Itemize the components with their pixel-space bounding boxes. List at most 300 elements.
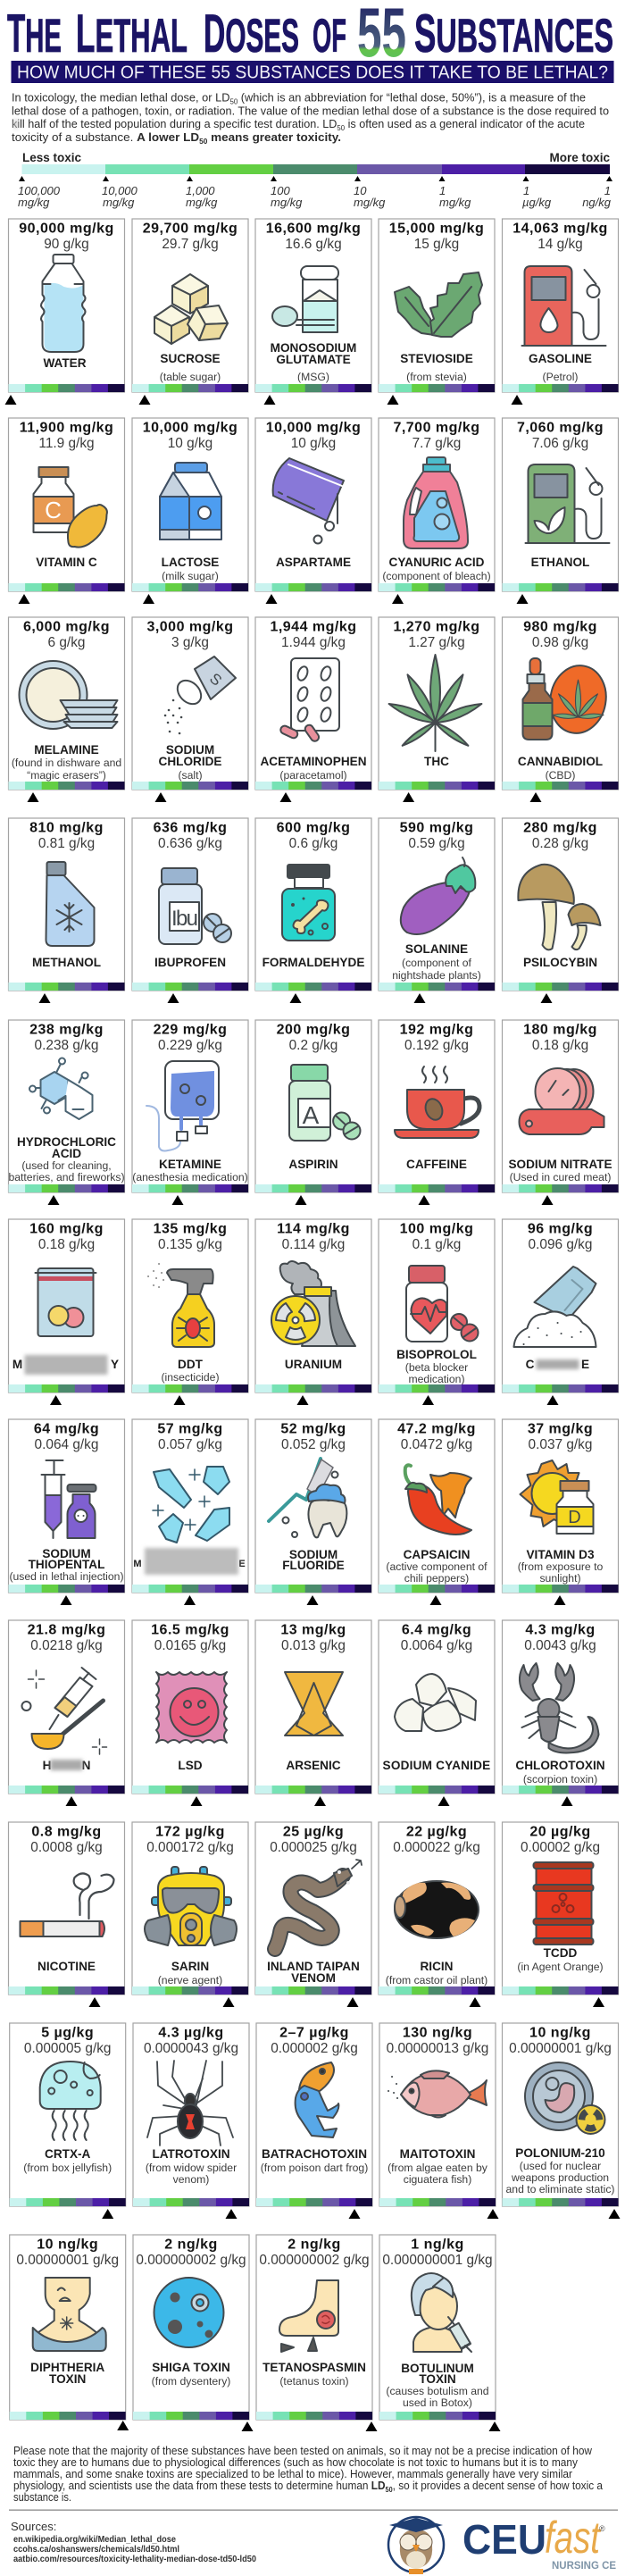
marker (61, 1595, 71, 1605)
dose: 0.18 g/kg (38, 1237, 95, 1252)
marker (241, 2421, 254, 2431)
sources: Sources: (11, 2520, 56, 2533)
name: sunlight) (539, 1572, 581, 1585)
icon: crystals (153, 1467, 229, 1543)
dose: 229 mg/kg (154, 1022, 227, 1038)
dose: 0.013 g/kg (281, 1638, 346, 1653)
logo: owl mascot and ceufast wordmark (388, 2513, 616, 2574)
name: LACTOSE (162, 556, 219, 569)
card: cyanuric acid (379, 418, 495, 604)
logo: owl mascot and ceufast wordmark: NURSING CE (552, 2559, 616, 2572)
name with blurred patch: E (238, 1559, 246, 1569)
scale strip (132, 782, 248, 790)
dose: 0.28 g/kg (532, 836, 588, 851)
dose (393, 620, 480, 650)
intro text: means greater toxicity. (207, 130, 341, 144)
name: POLONIUM-210 (515, 2146, 605, 2160)
icon: poison dart frog (296, 2062, 338, 2137)
name: TOXIN (49, 2372, 86, 2386)
name: CYANURIC ACID (389, 556, 485, 569)
marker (403, 792, 414, 802)
dose: 0.229 g/kg (158, 1038, 222, 1053)
marker (307, 1595, 318, 1605)
icon: box jellyfish (40, 2062, 101, 2140)
icon: salt shaker (165, 657, 236, 733)
name: FORMALDEHYDE (262, 956, 364, 969)
icon: widow spider (147, 2061, 233, 2145)
logo: owl mascot and ceufast wordmark: ® (599, 2524, 605, 2533)
marker (593, 1997, 604, 2007)
logo: owl mascot and ceufast wordmark: fast (545, 2513, 602, 2563)
marker (554, 1595, 566, 1605)
name: (beta blocker (405, 1361, 468, 1374)
dose: 0.0008 g/kg (30, 1840, 103, 1855)
dose: 0.238 g/kg (35, 1038, 98, 1053)
card: sodium nitrate (502, 1020, 618, 1205)
marker (223, 1997, 234, 2007)
name (160, 352, 221, 383)
dose: 0.192 g/kg (404, 1038, 469, 1053)
name with blurred patch (12, 1355, 119, 1375)
name: (MSG) (297, 371, 329, 383)
name: CHLORIDE (159, 755, 221, 768)
title: LETHAL (76, 4, 188, 63)
name: (CBD) (546, 769, 575, 782)
dose (146, 620, 234, 650)
icon: plates (20, 661, 118, 729)
name: (anesthesia medication) (132, 1171, 248, 1183)
footnote text: 50 (386, 2486, 393, 2494)
name: SHIGA TOXIN (152, 2361, 230, 2374)
dose: 2 ng/kg (164, 2237, 218, 2253)
dose: 47.2 mg/kg (397, 1422, 476, 1436)
name (396, 1348, 477, 1385)
card: shiga toxin (133, 2235, 254, 2431)
marker (346, 1997, 359, 2007)
icon: tooth and toothbrush (269, 1459, 346, 1537)
name: KETAMINE (159, 1158, 221, 1171)
name: (active component of (386, 1560, 488, 1573)
name: ciguatera fish) (404, 2173, 471, 2186)
name with blurred patch (526, 1358, 589, 1371)
name: (used in lethal injection) (9, 1570, 124, 1583)
name: INLAND TAIPAN (267, 1960, 360, 1973)
dose: 3,000 mg/kg (146, 620, 234, 634)
name: IBUPROFEN (154, 956, 226, 969)
marker (541, 993, 552, 1003)
dose (270, 1824, 357, 1855)
name: BISOPROLOL (396, 1348, 477, 1361)
toxicity scale legend: mg/kg (271, 196, 303, 209)
dose (523, 1022, 597, 1053)
icon: snake (275, 1860, 362, 1949)
dose: 7.06 g/kg (532, 436, 588, 451)
sources (11, 2520, 256, 2564)
dose: 135 mg/kg (154, 1222, 227, 1236)
dose: 0.057 g/kg (158, 1437, 222, 1452)
scale strip (9, 1786, 125, 1794)
card: inland taipan venom (255, 1822, 371, 2007)
scale strip (132, 384, 248, 392)
dose (30, 1824, 103, 1855)
card: psilocybin (502, 818, 618, 1003)
dose: 0.000022 g/kg (393, 1840, 480, 1855)
dose (397, 1422, 476, 1452)
marker (39, 993, 50, 1003)
scale strip (133, 2412, 249, 2420)
icon: antifreeze jug (46, 862, 95, 946)
name: URANIUM (285, 1358, 342, 1371)
card: nicotine (9, 1822, 125, 2007)
card: redacted substance, row 6 col 5 (502, 1219, 618, 1405)
dose (154, 820, 227, 851)
toxicity scale legend: 1 (523, 184, 529, 197)
dose: 15,000 mg/kg (389, 222, 484, 236)
name (515, 1759, 605, 1786)
dose: 7,060 mg/kg (517, 420, 604, 436)
marker (155, 792, 166, 802)
card: capsaicin (379, 1419, 495, 1605)
footnote text: mammals, and some snake toxins are specialized to be lethal to mice). However, mammals generally have very similar (13, 2467, 573, 2480)
scale strip (379, 384, 495, 392)
name: (scorpion toxin) (523, 1773, 597, 1786)
dose: 10 g/kg (168, 436, 212, 451)
marker (280, 792, 291, 802)
name: “magic erasers”) (27, 769, 106, 782)
name: LATROTOXIN (152, 2147, 230, 2161)
icon: fuel pump (521, 266, 605, 346)
name: BATRACHOTOXIN (262, 2147, 367, 2161)
dose (523, 620, 597, 650)
dose: 10 ng/kg (37, 2237, 98, 2253)
name: MONOSODIUM (271, 341, 356, 355)
sources: ccohs.ca/oshanswers/chemicals/ld50.html (13, 2544, 179, 2555)
card: hydrochloric acid (8, 1020, 125, 1205)
toxicity scale legend: mg/kg (354, 196, 386, 209)
dose: 0.037 g/kg (529, 1437, 592, 1452)
dose: 90,000 mg/kg (19, 222, 114, 236)
card: tetanospasmin (256, 2235, 377, 2431)
marker (422, 1395, 434, 1405)
name (8, 1135, 125, 1183)
name: medication) (409, 1373, 464, 1385)
name (30, 2361, 104, 2386)
intro text: 50 (229, 98, 238, 105)
dose: 0.000172 g/kg (146, 1840, 234, 1855)
footnote text (13, 2444, 604, 2504)
dose: 2–7 µg/kg (279, 2026, 349, 2040)
dose (266, 222, 361, 252)
dose: 0.6 g/kg (289, 836, 338, 851)
marker (546, 1395, 559, 1405)
card: gasoline (502, 219, 618, 405)
name with blurred patch (133, 1548, 246, 1575)
name (158, 1960, 222, 1986)
name: MAITOTOXIN (400, 2147, 475, 2161)
icon: bleach bottle (404, 457, 468, 548)
card: aspartame (255, 418, 371, 604)
scale strip (255, 1184, 371, 1192)
toxicity scale legend: 10,000 (102, 184, 138, 197)
scale strip (379, 1184, 495, 1192)
toxicity scale legend: Less toxic (22, 151, 82, 164)
dose: 0.000000001 g/kg (382, 2253, 493, 2268)
icon: fish (388, 2070, 487, 2117)
dose: 0.000000002 g/kg (259, 2253, 370, 2268)
scale strip (502, 2198, 618, 2206)
dose: 810 mg/kg (29, 820, 104, 836)
name: GLUTAMATE (276, 353, 351, 366)
scale strip (9, 384, 125, 392)
name: (salt) (178, 769, 203, 782)
dose (143, 420, 238, 451)
toxicity scale legend: 1 (439, 184, 446, 197)
toxicity scale legend: mg/kg (186, 196, 218, 209)
dose (154, 1022, 227, 1053)
icon: cannabis leaf (388, 655, 483, 751)
scale strip (255, 1786, 371, 1794)
dose (29, 1222, 104, 1252)
name (271, 341, 356, 383)
name: BOTULINUM (401, 2362, 474, 2375)
intro text: lethal dose of a pathogen, toxin, or radiation. The value of the median lethal dose of a substance is the dose required to (12, 104, 609, 118)
name: (from stevia) (406, 371, 467, 383)
dose (23, 620, 110, 650)
name: (causes botulism and (386, 2385, 489, 2397)
dose: 3 g/kg (171, 635, 209, 650)
dose: 130 ng/kg (403, 2026, 472, 2040)
card: botulinum toxin (379, 2235, 500, 2431)
name: (milk sugar) (162, 570, 219, 582)
name: (component of bleach) (382, 570, 491, 582)
name: (from widow spider (146, 2162, 237, 2174)
dose (389, 222, 484, 252)
sources: aatbio.com/resources/toxicity-lethality-median-dose-td50-ld50 (13, 2554, 256, 2564)
marker (414, 993, 425, 1003)
name: SOLANINE (405, 942, 468, 956)
intro text: (which is an abbreviation for “lethal dose, 50%”), is a measure of the (238, 91, 586, 104)
card: latrotoxin (133, 2023, 249, 2219)
scale strip (502, 1786, 618, 1794)
name: (from box jellyfish) (23, 2162, 112, 2174)
name: THC (424, 755, 449, 768)
name: FLUORIDE (282, 1559, 345, 1572)
dose: 29,700 mg/kg (143, 222, 238, 236)
dose: 0.0218 g/kg (30, 1638, 103, 1653)
dose: 15 g/kg (414, 237, 459, 252)
name with blurred patch: M (133, 1559, 142, 1569)
marker (438, 1796, 450, 1806)
name: (in Agent Orange) (517, 1961, 604, 1973)
name (282, 1548, 345, 1572)
scale strip (255, 983, 371, 991)
dose (517, 420, 604, 451)
card: ketamine (132, 1020, 248, 1205)
scale strip (132, 983, 248, 991)
name: VITAMIN C (36, 556, 97, 569)
dose (143, 222, 238, 252)
name (529, 352, 592, 383)
title (7, 0, 613, 71)
icon: cbd oil (523, 658, 612, 740)
dose: 0.0000043 g/kg (144, 2041, 238, 2056)
dose (382, 2237, 493, 2268)
intro text (12, 91, 609, 146)
dose (271, 2026, 358, 2056)
name (162, 556, 219, 582)
card: chlorotoxin (502, 1620, 618, 1806)
icon: vitamin bottle and lemon: C (45, 497, 62, 523)
name (262, 2361, 366, 2388)
icon: molecule (29, 1058, 93, 1119)
name: (tetanus toxin) (279, 2375, 349, 2388)
dose: 0.98 g/kg (532, 635, 588, 650)
footnote text: physiology, and scientists use the data from these tests to determine human LD (13, 2479, 404, 2492)
icon: cigarette (20, 1873, 114, 1936)
dose (259, 2237, 370, 2268)
dose (20, 420, 113, 451)
dose (154, 1222, 227, 1252)
name: (found in dishware and (12, 757, 121, 769)
name: (from dysentery) (152, 2375, 230, 2388)
name: (insecticide) (161, 1371, 220, 1384)
marker (511, 395, 523, 405)
marker (366, 2421, 377, 2431)
dose (136, 2237, 246, 2268)
dose: 10 ng/kg (529, 2026, 591, 2040)
toxicity scale legend: More toxic (549, 151, 610, 164)
name: (nerve agent) (158, 1974, 222, 1986)
scale strip (255, 1585, 371, 1593)
dose: 0.0043 g/kg (524, 1638, 596, 1653)
dose: 160 mg/kg (29, 1222, 104, 1236)
dose (509, 2026, 612, 2056)
name with blurred patch (43, 1759, 90, 1772)
scale strip (255, 583, 371, 591)
dose: 636 mg/kg (154, 820, 227, 836)
name: (from exposure to (518, 1560, 603, 1573)
dose: 180 mg/kg (523, 1022, 597, 1038)
name: ASPIRIN (288, 1158, 338, 1171)
marker (50, 1395, 62, 1405)
dose: 0.064 g/kg (35, 1437, 98, 1452)
name (23, 2147, 112, 2174)
dose: 1,944 mg/kg (270, 620, 357, 634)
scale strip (502, 1384, 618, 1393)
dose: 14,063 mg/kg (512, 222, 608, 236)
name: MELAMINE (34, 743, 99, 757)
name: (used for nuclear (520, 2160, 601, 2172)
name with blurred patch: E (581, 1358, 589, 1371)
dose (523, 820, 597, 851)
name: and to eliminate static) (506, 2183, 614, 2195)
name with blurred patch: H (43, 1759, 51, 1772)
name: venom) (173, 2173, 209, 2186)
name: (from poison dart frog) (261, 2162, 368, 2174)
dose (29, 1022, 104, 1053)
marker (102, 2209, 113, 2219)
icon: sugar cubes (154, 274, 228, 344)
card: vitamin d3 (502, 1419, 618, 1605)
marker (314, 1796, 326, 1806)
card: ddt (132, 1219, 248, 1405)
marker (117, 2421, 129, 2430)
card: lactose (132, 418, 248, 604)
name: CHLOROTOXIN (515, 1759, 605, 1772)
scale strip (502, 1585, 618, 1593)
name (132, 1158, 248, 1183)
dose (528, 1222, 593, 1252)
scale strip (10, 2198, 126, 2206)
card: diphtheria toxin (10, 2235, 129, 2430)
dose (280, 1622, 346, 1653)
name with blurred patch: M (12, 1358, 22, 1371)
card: cannabidiol (502, 617, 618, 802)
footnote text: substance is. (13, 2490, 71, 2504)
dose: 52 mg/kg (280, 1422, 346, 1436)
name (267, 1960, 360, 1985)
name: TETANOSPASMIN (262, 2361, 366, 2374)
subtitle banner: HOW MUCH OF THESE 55 SUBSTANCES DOES IT TAKE TO BE LETHAL? (17, 63, 608, 82)
scale strip (379, 1384, 495, 1393)
icon: milk carton (160, 463, 221, 539)
icon: salt shaker: S (206, 670, 225, 690)
scale strip (132, 1585, 248, 1593)
dose (19, 222, 114, 252)
dose: 10 g/kg (291, 436, 336, 451)
scale strip (502, 583, 618, 591)
card: arsenic (255, 1620, 371, 1806)
scale strip (132, 583, 248, 591)
icon: aspirin bottle: A (303, 1101, 320, 1129)
card: bisoprolol (379, 1219, 495, 1405)
icon: ibuprofen bottle: Ibu (171, 907, 198, 931)
name (518, 1548, 603, 1585)
marker (171, 1195, 184, 1205)
name: CAFFEINE (406, 1158, 467, 1171)
name (506, 2146, 614, 2195)
card: redacted substance, crystals (132, 1419, 248, 1605)
icon: sun and vitamin bottle (520, 1460, 593, 1534)
card: water (5, 219, 125, 405)
name: TCDD (544, 1946, 578, 1960)
marker (143, 594, 154, 604)
name (9, 1547, 124, 1583)
dose: 22 µg/kg (406, 1824, 467, 1840)
dose (401, 1622, 472, 1653)
dose: 0.00000001 g/kg (16, 2253, 119, 2268)
icon: toxic barrel (534, 1862, 593, 1945)
name: LSD (178, 1759, 203, 1772)
scale strip (502, 983, 618, 991)
dose: 6 g/kg (48, 635, 85, 650)
icon: cured meat (520, 1068, 604, 1134)
name: CANNABIDIOL (518, 755, 603, 768)
name: SODIUM (289, 1548, 338, 1561)
name: SODIUM (42, 1547, 91, 1560)
name: (table sugar) (160, 371, 221, 383)
dose (24, 2026, 111, 2056)
name (518, 755, 603, 782)
marker (541, 1195, 554, 1205)
card: methanol (9, 818, 125, 1003)
dose (393, 1824, 480, 1855)
icon: spray bottle (148, 1264, 214, 1347)
icon: aspirin bottle (289, 1065, 361, 1141)
marker (191, 1796, 202, 1806)
card: sodium fluoride (255, 1419, 371, 1605)
toxicity scale legend: mg/kg (439, 196, 471, 209)
